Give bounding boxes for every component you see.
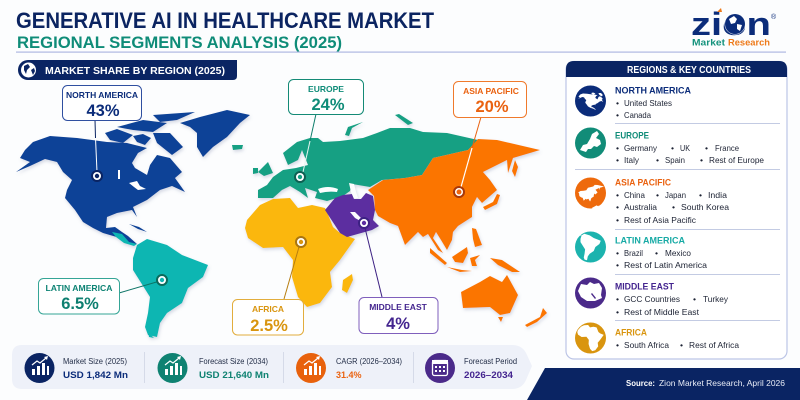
row: asia pacific: • <box>656 190 659 200</box>
row: middle east <box>575 278 729 317</box>
row: asia pacific: • <box>699 190 702 200</box>
callout: europe <box>288 80 364 182</box>
row: europe: Rest of Europe <box>709 155 764 165</box>
callout: africa <box>232 237 306 335</box>
panel: regions and key countries <box>566 61 787 359</box>
panel header <box>566 61 787 77</box>
row: asia pacific: ASIA PACIFIC <box>615 178 671 188</box>
stat: forecast size <box>158 353 269 383</box>
row: asia pacific: • <box>616 215 619 225</box>
callout: asia pacific <box>454 82 526 197</box>
row: asia pacific: • <box>616 190 619 200</box>
footer: source bar <box>527 368 800 400</box>
row: north america: Canada <box>624 110 651 120</box>
row: europe: France <box>715 143 739 153</box>
logo: Market <box>692 36 725 48</box>
row: asia pacific: South Korea <box>681 202 729 212</box>
region: north america <box>16 110 250 244</box>
row: europe: • <box>705 143 708 153</box>
callout: asia pacific: 20% <box>475 98 509 116</box>
region: asia pacific <box>368 139 547 327</box>
stat: cagr: CAGR (2026–2034) <box>336 357 402 366</box>
row: latin america: • <box>616 260 619 270</box>
callout: north america <box>62 86 142 181</box>
stat: forecast period: Forecast Period <box>464 357 517 366</box>
logo: Research <box>728 36 770 48</box>
row: europe: Germany <box>624 143 658 153</box>
stat: forecast size: USD 21,640 Mn <box>199 370 269 380</box>
row: north america: • <box>616 110 619 120</box>
callout: europe: EUROPE <box>308 84 344 94</box>
row: middle east: • <box>693 294 696 304</box>
row: north america: United States <box>624 98 672 108</box>
callout: asia pacific: ASIA PACIFIC <box>463 86 519 96</box>
footer: source bar: Zion Market Research, April 2026 <box>659 378 785 388</box>
row: asia pacific <box>575 178 729 225</box>
region: latin america <box>112 232 208 338</box>
row: asia pacific: • <box>616 202 619 212</box>
row: latin america <box>575 232 707 270</box>
callout: latin america: 6.5% <box>61 295 99 313</box>
row: middle east: • <box>616 294 619 304</box>
row: middle east: Turkey <box>703 294 729 304</box>
row: asia pacific: China <box>624 190 645 200</box>
callout: africa: AFRICA <box>252 304 284 314</box>
callout: latin america <box>38 275 167 314</box>
callout: middle east: MIDDLE EAST <box>369 302 428 312</box>
row: asia pacific: Rest of Asia Pacific <box>624 215 697 225</box>
row: latin america: Rest of Latin America <box>624 260 707 270</box>
row: middle east: Rest of Middle East <box>624 307 700 317</box>
row: asia pacific: Australia <box>624 202 657 212</box>
stat: forecast period <box>425 353 517 383</box>
callout: north america: 43% <box>86 102 120 120</box>
logo: ® <box>771 13 777 21</box>
row: africa: • <box>616 340 619 350</box>
row: latin america: Brazil <box>624 248 643 258</box>
stat: market size <box>24 353 128 383</box>
row: north america: NORTH AMERICA <box>615 86 691 96</box>
row: middle east: • <box>616 307 619 317</box>
row: middle east: MIDDLE EAST <box>615 282 674 292</box>
row: middle east: GCC Countries <box>624 294 680 304</box>
world map <box>16 110 547 338</box>
row: africa: South Africa <box>624 340 669 350</box>
callout: europe: 24% <box>311 96 345 114</box>
row: latin america: Mexico <box>665 248 691 258</box>
row: europe <box>575 128 764 165</box>
section pill: market share by region: MARKET SHARE BY REGION (2025) <box>45 65 225 77</box>
row: north america <box>575 86 691 120</box>
callout: middle east <box>359 218 438 334</box>
title: GENERATIVE AI IN HEALTHCARE MARKET <box>16 8 435 33</box>
row: europe: • <box>616 143 619 153</box>
callout: middle east: 4% <box>386 315 410 333</box>
row: africa: Rest of Africa <box>689 340 739 350</box>
callout: latin america: LATIN AMERICA <box>46 283 112 293</box>
row: africa: • <box>680 340 683 350</box>
stat: market size: USD 1,842 Mn <box>63 370 128 380</box>
row: asia pacific: India <box>708 190 727 200</box>
row: europe: • <box>700 155 703 165</box>
row: latin america: • <box>655 248 658 258</box>
panel header: REGIONS & KEY COUNTRIES <box>627 65 751 76</box>
row: europe: • <box>671 143 674 153</box>
stat: forecast size: Forecast Size (2034) <box>199 357 268 366</box>
region: europe <box>232 114 478 201</box>
stat: cagr <box>296 353 402 383</box>
stat: forecast period: 2026–2034 <box>464 370 513 380</box>
row: latin america: LATIN AMERICA <box>615 236 685 246</box>
row: europe: • <box>616 155 619 165</box>
subtitle: REGIONAL SEGMENTS ANALYSIS (2025) <box>17 33 342 52</box>
region: africa <box>245 198 355 307</box>
footer: source bar: Source: <box>626 378 655 388</box>
stat: cagr: 31.4% <box>336 370 362 380</box>
row: europe: Italy <box>624 155 640 165</box>
logo: zion <box>691 6 771 42</box>
stat: market size: Market Size (2025) <box>63 357 127 366</box>
region: middle east <box>325 193 379 237</box>
row: africa: AFRICA <box>615 328 647 338</box>
row: asia pacific: Japan <box>665 190 686 200</box>
callout: north america: NORTH AMERICA <box>66 90 138 100</box>
row: africa <box>575 322 739 354</box>
row: europe: UK <box>680 143 690 153</box>
row: north america: • <box>616 98 619 108</box>
row: europe: • <box>656 155 659 165</box>
row: latin america: • <box>616 248 619 258</box>
logo <box>691 6 777 48</box>
row: europe: Spain <box>665 155 685 165</box>
section pill: market share by region <box>18 60 237 80</box>
stats bar <box>12 345 532 389</box>
callout: africa: 2.5% <box>250 317 288 335</box>
row: europe: EUROPE <box>615 130 649 142</box>
row: asia pacific: • <box>672 202 675 212</box>
